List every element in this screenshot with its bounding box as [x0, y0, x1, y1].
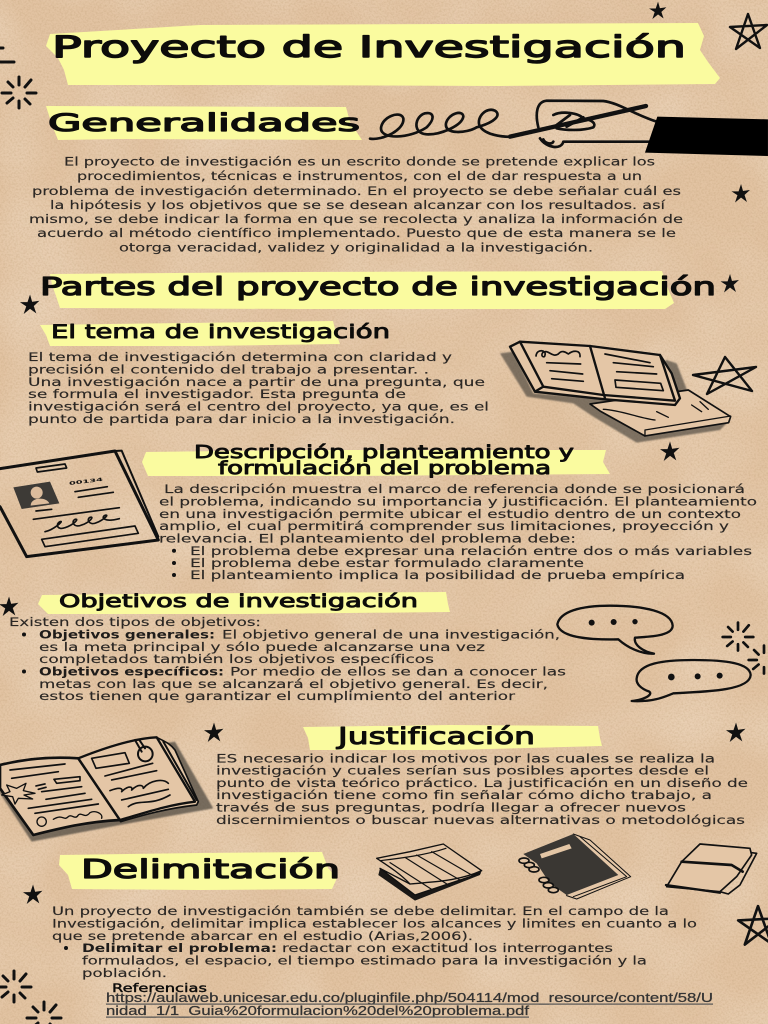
icon: outline star [693, 357, 756, 394]
text: objetivos list: estos tienen que garantizar el cumplimiento del anterior [39, 689, 515, 703]
text: tema paragraph: investigación será el centro del proyecto, ya que, es el [28, 400, 489, 414]
text: generalidades paragraph: mismo, se debe indicar la forma en que se recolecta y analiza la información de [29, 212, 683, 226]
heading: Descripción, planteamiento y formulación del problema: formulación del problema [218, 458, 551, 479]
text: generalidades paragraph [29, 154, 683, 254]
icon: speech bubbles [557, 606, 751, 701]
text: objetivos list: metas con las que se alcanzará el objetivo general. Es decir, [39, 677, 548, 691]
text: objetivos list: Por medio de ellos se dan a conocer las [230, 664, 566, 678]
text: descripción paragraph: relevancia. El planteamiento del problema debe: [159, 532, 576, 546]
text: delimitación paragraph: formulados, el espacio, el tiempo estimado para la investigación y la [82, 954, 647, 968]
text: delimitación paragraph: redactar con exactitud los interrogantes [282, 941, 613, 955]
icon: dark spiral notebook [519, 834, 631, 899]
references: https://aulaweb.unicesar.edu.co/pluginfile.php/504114/mod_resource/content/58/U [106, 990, 713, 1005]
heading: Objetivos de investigación: Objetivos de investigación [59, 591, 418, 612]
outline stars [730, 14, 768, 945]
text: justificación paragraph: discernimientos o buscar nuevas alternativas o metodológicas [216, 813, 745, 827]
heading: El tema de investigación: El tema de investigación [51, 321, 390, 343]
text: delimitación paragraph: población. [82, 966, 167, 980]
text: descripción paragraph: El problema debe estar formulado claramente [190, 556, 584, 570]
icon: hand writing with pen [370, 101, 768, 156]
heading: Objetivos de investigación [38, 591, 450, 614]
text: generalidades paragraph: El proyecto de investigación es un escrito donde se pretende explicar los [64, 154, 655, 168]
icon: document with photo [0, 451, 158, 557]
text: descripción paragraph: en una investigación permite ubicar el estudio dentro de un contexto [159, 507, 741, 521]
text: delimitación paragraph: que se pretende abarcar en el estudio (Arias,2006). [52, 929, 473, 943]
text: objetivos list [9, 615, 566, 703]
icon: notepad [377, 844, 482, 901]
heading: Descripción, planteamiento y formulación del problema: Descripción, planteamiento y [194, 442, 574, 463]
text: objetivos list: completados también los objetivos específicos [39, 652, 434, 666]
text: generalidades paragraph: acuerdo al método científico implementado. Puesto que de esta manera se le [37, 226, 676, 240]
heading: El tema de investigación [40, 321, 390, 346]
text: tema paragraph: precisión el contenido del trabajo a presentar. . [28, 362, 429, 376]
text: objetivos list: Existen dos tipos de objetivos: [9, 615, 261, 629]
icon: notebook with band [666, 844, 757, 894]
text: tema paragraph: punto de partida para dar inicio a la investigación. [28, 412, 455, 426]
text: justificación paragraph: punto de vista teórico práctico. La justificación en un diseño de [216, 776, 748, 790]
text: descripción paragraph: El planteamiento implica la posibilidad de prueba empírica [190, 568, 685, 582]
text: tema paragraph: se formula el investigador. Esta pregunta de [28, 387, 406, 401]
text: justificación paragraph [216, 752, 748, 827]
text: objetivos list: El objetivo general de una investigación, [222, 628, 560, 642]
text: objetivos list: Objetivos generales: [39, 628, 215, 642]
heading: Partes del proyecto de investigación [40, 271, 716, 309]
heading: Justificación [303, 724, 602, 750]
title: Proyecto de Investigación [52, 30, 686, 64]
text: tema paragraph [28, 350, 489, 426]
heading: Generalidades: Generalidades [48, 109, 360, 137]
icon: open notebook [0, 737, 213, 842]
icon: open books [500, 342, 731, 443]
text: objetivos list: es la meta principal y sólo puede alcanzarse una vez [39, 640, 485, 654]
text: generalidades paragraph: otorga veracidad, validez y originalidad a la investigación. [119, 240, 593, 254]
text: justificación paragraph: investigación tiene como fin señalar cómo dicho trabajo, a [216, 788, 712, 802]
text: descripción paragraph: El problema debe expresar una relación entre dos o más variables [190, 544, 752, 558]
text: delimitación paragraph: Delimitar el problema: [82, 941, 277, 955]
references: Referencias [112, 981, 207, 995]
text: tema paragraph: El tema de investigación determina con claridad y [28, 350, 452, 364]
text: descripción paragraph: La descripción muestra el marco de referencia donde se posicionará [164, 482, 745, 496]
text: generalidades paragraph: la hipótesis y los objetivos que se se desean alcanzar con los resultados. así [50, 198, 666, 212]
text: tema paragraph: Una investigación nace a partir de una pregunta, que [28, 375, 485, 389]
text: generalidades paragraph: problema de investigación determinado. En el proyecto se debe señalar cuál es [32, 184, 681, 198]
heading: Delimitación: Delimitación [81, 855, 340, 885]
heading: Descripción, planteamiento y formulación del problema [142, 442, 610, 479]
icon: document with photo: 00134 [69, 477, 105, 487]
text: generalidades paragraph: procedimientos, técnicas e instrumentos, con el de dar respuesta a un [77, 169, 642, 183]
text: objetivos list: Objetivos específicos: [39, 664, 224, 678]
references [106, 981, 713, 1018]
text: delimitación paragraph [52, 904, 697, 980]
text: justificación paragraph: investigación y cuales serían sus posibles aportes desde el [216, 764, 709, 778]
text: justificación paragraph: ES necesario indicar los motivos por las cuales se realiza la [216, 752, 715, 766]
heading: Generalidades [46, 106, 362, 140]
heading: Partes del proyecto de investigación: Partes del proyecto de investigación [40, 272, 716, 301]
text: delimitación paragraph: Investigación, delimitar implica establecer los alcances y limites en cuanto a lo [52, 916, 697, 930]
title [46, 23, 720, 86]
text: delimitación paragraph: Un proyecto de investigación también se debe delimitar. En el campo de la [52, 904, 669, 918]
heading: Delimitación [59, 852, 340, 890]
text: descripción paragraph [159, 482, 757, 582]
heading: Justificación: Justificación [335, 724, 535, 750]
text: descripción paragraph: amplio, el cual permitirá comprender sus limitaciones, proyección y [159, 519, 729, 533]
text: justificación paragraph: través de sus preguntas, podría llegar a ofrecer nuevos [216, 800, 686, 814]
text: descripción paragraph: el problema, indicando su importancia y justificación. El planteamiento [159, 494, 757, 508]
references: nidad_1/1_Guia%20formulacion%20del%20problema.pdf [106, 1003, 529, 1018]
